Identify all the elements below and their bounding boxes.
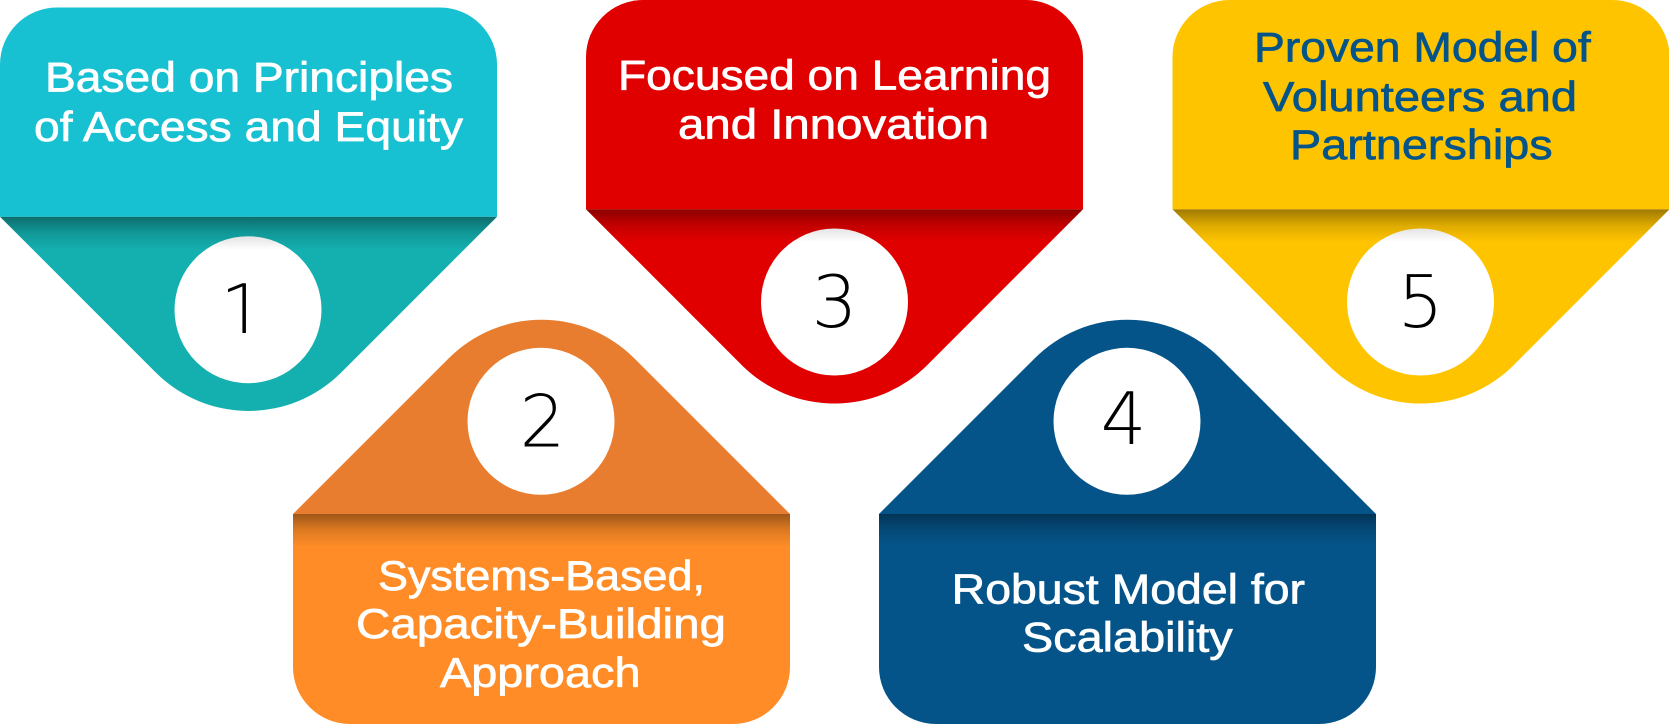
fold shadow (586, 209, 1083, 242)
fold shadow (879, 514, 1376, 547)
heading 5: Partnerships (1290, 121, 1553, 168)
panel 3: learning and innovation (586, 0, 1083, 404)
number 1: 1 (220, 269, 266, 353)
orange pointer (293, 320, 790, 514)
heading 5: Proven Model of (1254, 24, 1591, 71)
heading 3 (618, 52, 1051, 148)
heading 2: Systems-Based, (378, 552, 705, 599)
number 4: 4 (1101, 377, 1146, 461)
heading 4: Robust Model for (952, 565, 1305, 612)
heading 4 (952, 565, 1305, 661)
heading 2: Approach (440, 649, 640, 696)
blue pointer (879, 320, 1376, 514)
orange heading box (293, 514, 790, 724)
blue heading box (879, 514, 1376, 724)
heading 3: and Innovation (678, 100, 989, 148)
number circle 4 (1054, 348, 1200, 495)
panel 5: volunteers and partnerships (1172, 0, 1669, 404)
heading 2: Capacity-Building (356, 600, 726, 647)
yellow heading box (1172, 0, 1669, 209)
heading 1: Based on Principles (45, 54, 453, 101)
heading 2 (356, 552, 726, 696)
fold shadow (1172, 209, 1669, 242)
panel 2: systems-based approach (293, 320, 790, 724)
number circle 5 (1347, 228, 1494, 376)
number circle 3 (761, 228, 908, 376)
number 5: 5 (1398, 260, 1443, 344)
teal pointer (0, 217, 497, 411)
number 2: 2 (520, 380, 565, 464)
red heading box (586, 0, 1083, 209)
red pointer (586, 209, 1083, 404)
number circle 2 (468, 348, 614, 495)
heading 4: Scalability (1022, 614, 1233, 661)
teal heading box (0, 8, 497, 217)
number 3: 3 (812, 260, 857, 344)
fold shadow (293, 514, 790, 547)
panel 4: robust model for scalability (879, 320, 1376, 724)
heading 3: Focused on Learning (618, 52, 1051, 98)
number circle 1 (174, 236, 322, 383)
yellow pointer (1172, 209, 1669, 404)
heading 5 (1254, 24, 1591, 168)
heading 5: Volunteers and (1263, 73, 1577, 120)
heading 1 (34, 54, 463, 150)
heading 1: of Access and Equity (34, 103, 463, 150)
fold shadow (0, 217, 497, 250)
panel 1: access and equity (0, 8, 497, 411)
